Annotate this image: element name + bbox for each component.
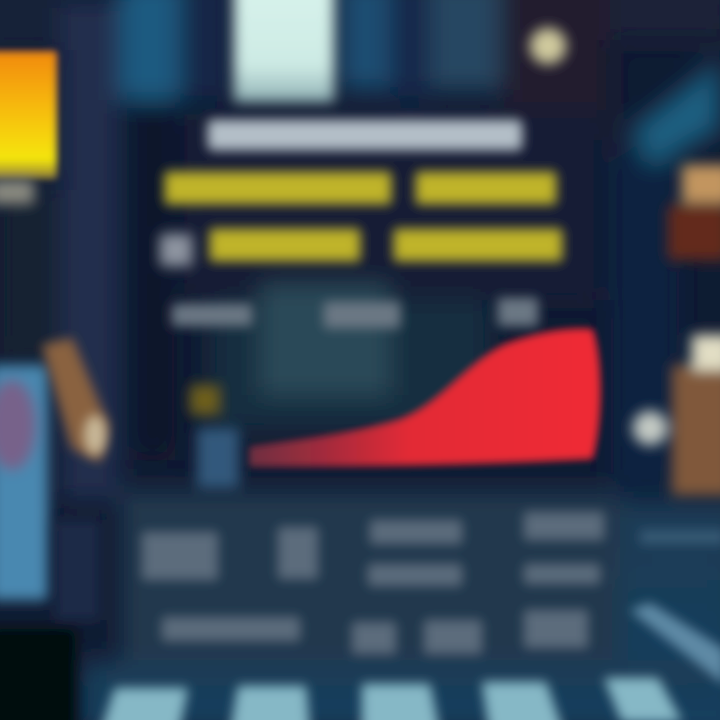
street lamp [530,28,566,64]
data table: illegible text cells [142,512,604,654]
small figure under chart [197,428,239,488]
title, lines 2 and 3: illegible yellow heading [165,172,562,261]
small icon beside title [160,234,192,266]
red area chart [250,330,600,466]
road markings, right [630,530,720,685]
crosswalk stripes [100,678,682,720]
person, left edge [0,338,108,720]
chart axis labels [172,298,538,328]
person, right edge [633,335,720,495]
brown shop sign, right [668,165,720,260]
yellow street sign [0,52,56,178]
pale sign reflection [0,180,34,204]
bright sky gap [234,0,334,102]
accent mark above chart baseline [190,385,220,415]
title, line 1: illegible white heading [208,120,522,150]
